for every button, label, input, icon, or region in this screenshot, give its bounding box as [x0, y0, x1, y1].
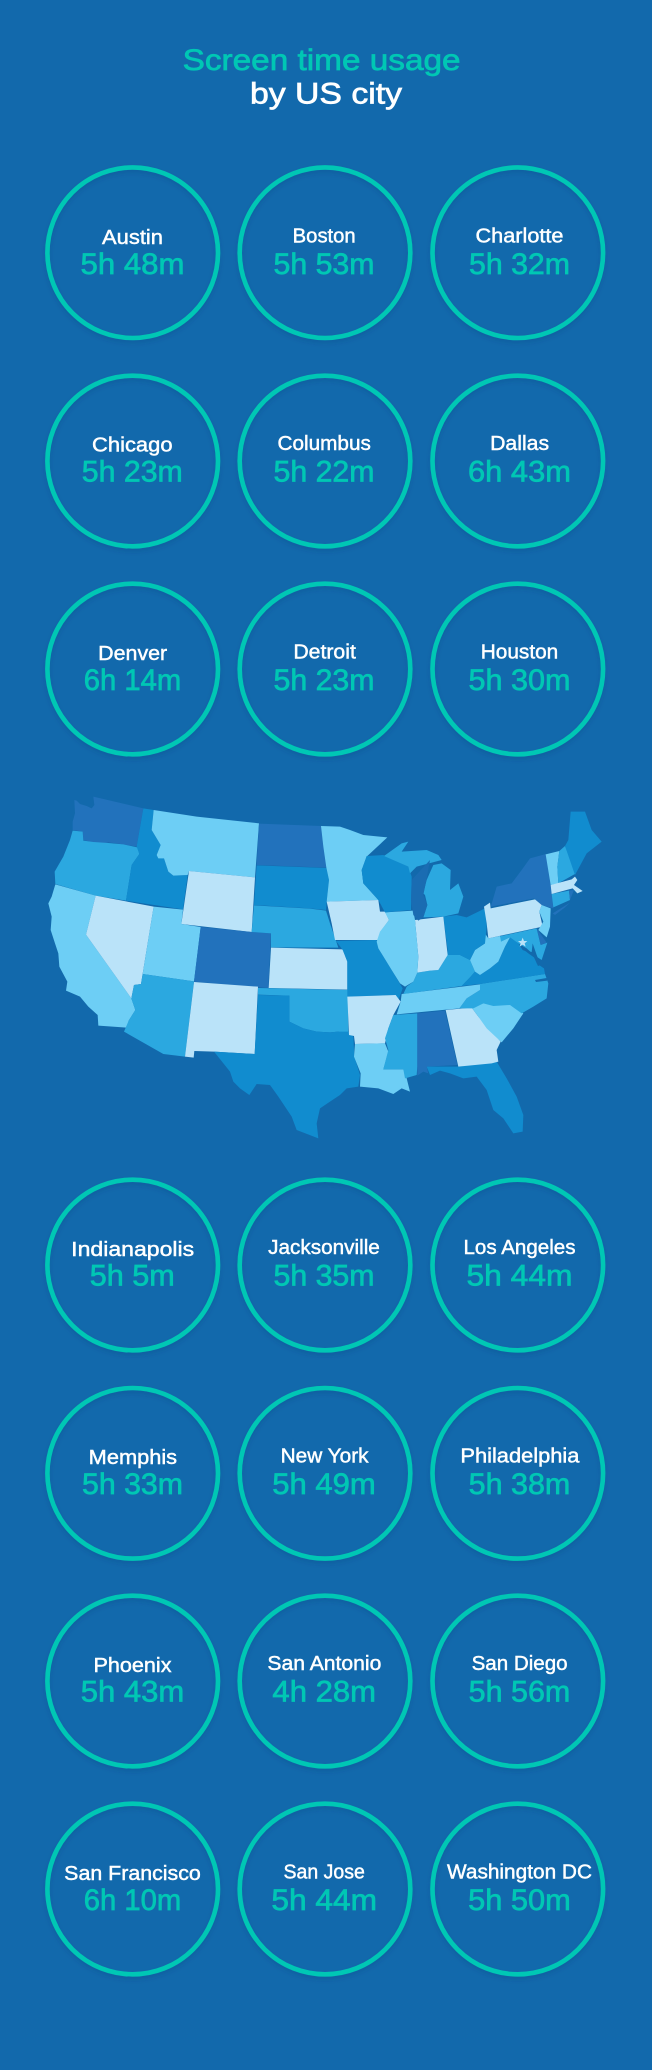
city: Memphis: [47, 1388, 218, 1559]
city: Philadelphia: [432, 1388, 603, 1559]
city: Philadelphia: Philadelphia: [460, 1445, 580, 1467]
US map: [48, 797, 602, 1138]
city: New York: New York: [281, 1445, 370, 1467]
city: Indianapolis: Indianapolis: [71, 1239, 194, 1261]
city: San Antonio: [240, 1596, 410, 1766]
city: Jacksonville: [240, 1180, 410, 1350]
city: Denver: 6h 14m: [84, 664, 181, 697]
city: Denver: [47, 584, 218, 754]
city: San Antonio: San Antonio: [267, 1653, 381, 1675]
city: San Jose: San Jose: [284, 1861, 365, 1883]
title: Screen time usage: [183, 44, 461, 77]
city: Chicago: Chicago: [92, 435, 173, 457]
city: Chicago: 5h 23m: [82, 456, 183, 489]
city: Detroit: [240, 584, 410, 754]
city: San Francisco: [47, 1804, 218, 1974]
city: Houston: [432, 584, 603, 754]
western states: [48, 797, 271, 1058]
city: Austin: Austin: [102, 227, 163, 249]
city: Dallas: 6h 43m: [468, 456, 571, 489]
city: Chicago: [47, 376, 218, 546]
city: Columbus: [240, 376, 410, 546]
city: San Diego: [432, 1596, 603, 1766]
city: Indianapolis: 5h 5m: [90, 1260, 175, 1293]
city: Detroit: Detroit: [293, 641, 356, 663]
Lake Michigan: [411, 860, 430, 921]
city: San Diego: San Diego: [472, 1653, 568, 1675]
city: Phoenix: Phoenix: [94, 1655, 172, 1677]
city: Memphis: Memphis: [89, 1447, 177, 1469]
city: Columbus: 5h 22m: [274, 456, 374, 489]
city: San Jose: 5h 44m: [271, 1884, 377, 1917]
city: San Jose: [240, 1804, 410, 1974]
city: Washington DC: [432, 1804, 603, 1974]
city: Houston: Houston: [481, 641, 558, 663]
city: Charlotte: 5h 32m: [469, 248, 570, 281]
city: Denver: Denver: [98, 643, 168, 665]
city: Dallas: Dallas: [490, 433, 549, 455]
city: Boston: 5h 53m: [274, 248, 374, 281]
city: New York: 5h 49m: [272, 1468, 376, 1501]
city: Memphis: 5h 33m: [82, 1468, 183, 1501]
city: Los Angeles: [432, 1180, 603, 1350]
city: San Francisco: 6h 10m: [84, 1884, 181, 1917]
city: Washington DC: 5h 50m: [468, 1884, 571, 1917]
city: Charlotte: Charlotte: [476, 225, 564, 247]
title: by US city: [250, 78, 402, 110]
city: Boston: Boston: [293, 225, 356, 247]
city: Boston: [240, 167, 410, 338]
city: Houston: 5h 30m: [468, 664, 570, 697]
city: Phoenix: 5h 43m: [81, 1676, 184, 1709]
city: Austin: [47, 167, 218, 338]
city: Austin: 5h 48m: [80, 248, 184, 281]
eastern states: [362, 812, 602, 1133]
city: Charlotte: [432, 167, 603, 338]
city: Washington DC: Washington DC: [447, 1861, 592, 1883]
title: [183, 44, 461, 110]
city: Phoenix: [47, 1596, 218, 1766]
city: San Antonio: 4h 28m: [272, 1676, 376, 1709]
city: Dallas: [432, 376, 603, 546]
icon: star marking Washington DC: [518, 938, 527, 947]
city: Jacksonville: Jacksonville: [268, 1237, 380, 1259]
city: San Diego: 5h 56m: [469, 1676, 570, 1709]
city: Los Angeles: 5h 44m: [466, 1260, 572, 1293]
city: Jacksonville: 5h 35m: [274, 1260, 374, 1293]
city: Indianapolis: [47, 1180, 218, 1350]
central states: [214, 824, 410, 1138]
city: Columbus: Columbus: [278, 433, 371, 455]
city: Philadelphia: 5h 38m: [469, 1468, 570, 1501]
city: New York: [240, 1388, 410, 1559]
city: Detroit: 5h 23m: [274, 664, 374, 697]
city: Los Angeles: Los Angeles: [464, 1237, 576, 1259]
city: San Francisco: San Francisco: [64, 1863, 201, 1885]
